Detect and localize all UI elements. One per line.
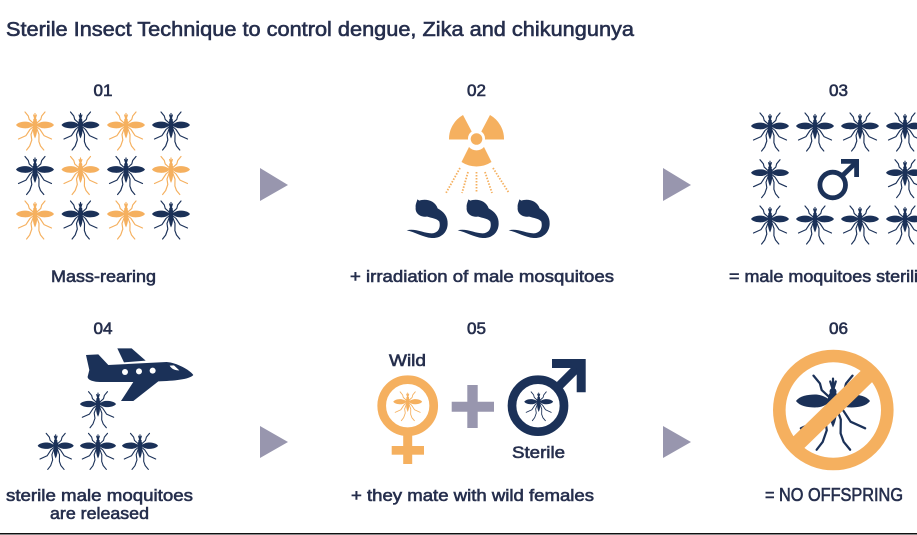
icon: three pupae xyxy=(407,199,550,238)
step number 05: 05 xyxy=(467,320,486,338)
icon: male symbol with mosquito xyxy=(512,359,586,432)
icon: radiation rays xyxy=(446,168,509,193)
icon: navy mosquito grid xyxy=(751,113,917,244)
panel: step 02 irradiation xyxy=(350,82,614,286)
arrow: step 02 to 03 xyxy=(663,168,691,201)
label: sterile male mosquitoes are released: are released xyxy=(50,504,149,523)
panel: step 04 release xyxy=(6,320,193,523)
arrow: step 01 to 02 xyxy=(260,168,288,201)
panel: step 01 mass-rearing xyxy=(16,82,190,286)
arrow: step 04 to 05 xyxy=(260,426,288,458)
label: sterile: Sterile xyxy=(512,443,565,462)
label: wild: Wild xyxy=(389,351,426,370)
panel: step 06 no offspring xyxy=(765,320,903,505)
icon: airplane xyxy=(86,348,193,401)
icon: plus sign xyxy=(452,385,494,428)
label: irradiation of male mosquitoes: + irradiation of male mosquitoes xyxy=(350,267,614,286)
label: mass-rearing: Mass-rearing xyxy=(51,267,156,286)
icon: grid of orange and navy mosquitoes xyxy=(16,112,190,239)
icon: released mosquitoes xyxy=(38,392,158,469)
arrow: step 05 to 06 xyxy=(663,426,691,458)
step number 04: 04 xyxy=(94,320,112,338)
icon: prohibited mosquito xyxy=(779,356,887,464)
label: sterile male mosquitoes are released: sterile male moquitoes xyxy=(6,486,193,505)
step number 06: 06 xyxy=(829,320,848,338)
step number 01: 01 xyxy=(94,82,112,100)
icon: male symbol xyxy=(820,161,857,198)
label: they mate with wild females: + they mate with wild females xyxy=(351,486,594,505)
label: no offspring: = NO OFFSPRING xyxy=(765,485,903,505)
panel: step 05 mating xyxy=(351,320,594,505)
label: sterile male mosquitoes are released xyxy=(6,486,193,523)
step number 02: 02 xyxy=(467,82,486,100)
panel: step 03 sterile males xyxy=(729,82,917,286)
icon: radiation trefoil xyxy=(449,115,504,166)
icon: female symbol with mosquito xyxy=(382,380,434,464)
step number 03: 03 xyxy=(829,82,848,100)
title: Sterile Insect Technique to control dengue, Zika and chikungunya xyxy=(6,18,635,41)
